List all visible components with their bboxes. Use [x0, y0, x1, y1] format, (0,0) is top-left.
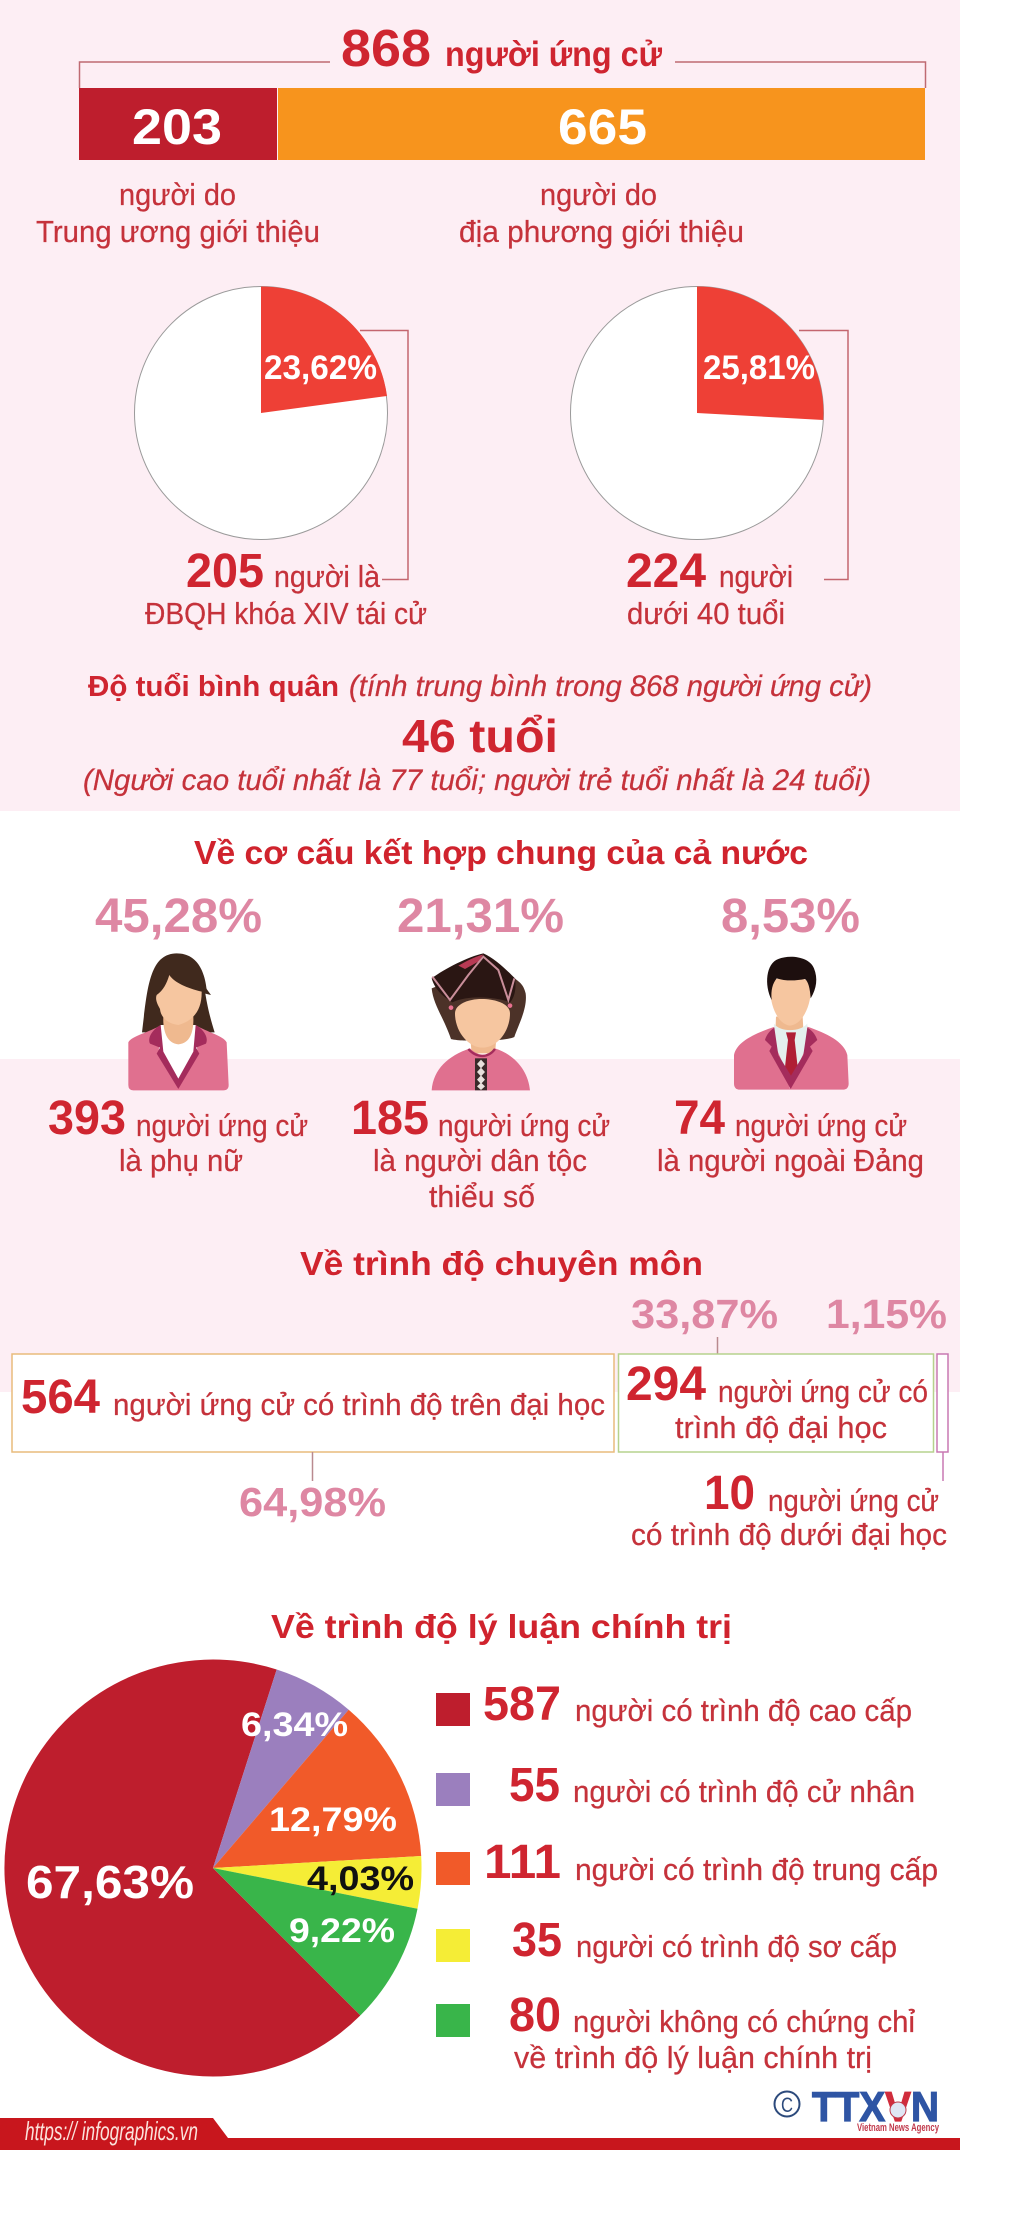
box: university 294	[618, 1354, 934, 1452]
footer: source band	[0, 2116, 960, 2150]
icon: ethnic minority woman	[432, 953, 530, 1090]
panel: qualification bars	[12, 1291, 948, 1552]
callout: 205 re-elected deputies: 205	[186, 545, 264, 598]
column: non-party	[657, 890, 924, 1178]
pie chart: 23,62% re-elected: 23,62%	[264, 349, 377, 387]
box: below university	[937, 1354, 948, 1452]
box: university 294: trình độ đại học	[675, 1410, 887, 1445]
legend item: 35 elementary	[436, 1914, 897, 1967]
callout: 205 re-elected deputies: ĐBQH khóa XIV tái cử	[145, 596, 427, 631]
legend item: 111 intermediate: 111	[484, 1836, 561, 1889]
title: 868 candidates	[341, 20, 663, 78]
percent: ethnic minorities: 21,31%	[397, 890, 564, 943]
caption: 74 non-party: là người ngoài Đảng	[657, 1143, 924, 1178]
box: university 294: 294	[626, 1358, 706, 1411]
pie chart: 25,81% under 40	[570, 286, 824, 540]
pie chart: 25,81% under 40: 25,81%	[703, 349, 815, 387]
label: local nomination: địa phương giới thiệu	[459, 214, 744, 249]
caption: 185 ethnic minorities: là người dân tộc	[373, 1143, 587, 1178]
legend item: 55 bachelor	[436, 1759, 915, 1812]
title: 868 candidates: 868	[341, 20, 431, 78]
caption: 10 below university: 10	[704, 1467, 755, 1520]
text block: average age: 46 tuổi	[402, 710, 558, 762]
bracket above the bar	[80, 62, 926, 88]
pie chart: political theory level	[4, 1660, 422, 2077]
legend item: 80 no certificate: về trình độ lý luận chính trị	[514, 2040, 872, 2075]
legend item: 35 elementary: người có trình độ sơ cấp	[576, 1929, 897, 1964]
caption: 74 non-party	[657, 1092, 924, 1178]
label: central nomination: người do	[119, 177, 236, 212]
heading: political theory: Về trình độ lý luận chính trị	[271, 1608, 732, 1645]
legend item: 80 no certificate	[436, 1989, 915, 2075]
label: local nomination	[459, 177, 744, 249]
connector: first pie to label	[360, 330, 408, 580]
tick: below university box	[942, 1452, 944, 1481]
legend item: 587 advanced: người có trình độ cao cấp	[575, 1693, 912, 1728]
label: local nomination: người do	[540, 177, 657, 212]
caption: 10 below university	[631, 1467, 947, 1552]
icon: man in suit	[734, 957, 849, 1090]
text block: average age: (tính trung bình trong 868 người ứng cử)	[349, 670, 872, 703]
connector: second pie to label	[799, 330, 848, 580]
pie chart: political theory level: 12,79%	[269, 1801, 397, 1839]
heading: national structure: Về cơ cấu kết hợp chung của cả nước	[194, 834, 808, 871]
callout: 224 under 40: 224	[626, 545, 706, 598]
label: central nomination: Trung ương giới thiệu	[36, 214, 320, 249]
percent: 33,87%: 33,87%	[631, 1291, 778, 1337]
panel: total candidates	[36, 20, 926, 249]
percent: non-party: 8,53%	[721, 890, 860, 943]
box: university 294: người ứng cử có	[718, 1374, 928, 1409]
caption: 393 women	[48, 1092, 308, 1178]
footer: source band: https:// infographics.vn	[25, 2116, 198, 2146]
callout: 205 re-elected deputies	[145, 545, 427, 631]
bar segment: 203 central: 203	[132, 99, 222, 155]
bar segment: 203 central	[79, 88, 277, 160]
text block: average age: Độ tuổi bình quân	[88, 671, 339, 703]
legend item: 55 bachelor: người có trình độ cử nhân	[573, 1774, 915, 1809]
pie chart: political theory level: 9,22%	[289, 1912, 395, 1950]
caption: 74 non-party: 74	[674, 1092, 725, 1145]
caption: 74 non-party: người ứng cử	[735, 1108, 907, 1143]
column: women	[48, 890, 308, 1178]
title: 868 candidates: người ứng cử	[445, 35, 663, 74]
callout: 224 under 40	[626, 545, 793, 631]
caption: 185 ethnic minorities: 185	[351, 1092, 429, 1145]
caption: 393 women: người ứng cử	[136, 1108, 308, 1143]
bar segment: 665 local: 665	[558, 99, 647, 155]
text block: average age: (Người cao tuổi nhất là 77 tuổi; người trẻ tuổi nhất là 24 tuổi)	[83, 764, 871, 797]
percent: 1,15%: 1,15%	[826, 1291, 947, 1337]
legend item: 587 advanced: 587	[483, 1678, 561, 1731]
logo: TTXVN: C	[781, 2094, 793, 2117]
caption: 393 women: là phụ nữ	[119, 1143, 243, 1178]
percent: women: 45,28%	[95, 890, 262, 943]
box: postgraduate 564: người ứng cử có trình độ trên đại học	[113, 1387, 605, 1422]
percent: 64,98%: 64,98%	[239, 1479, 386, 1525]
legend item: 55 bachelor: 55	[509, 1759, 560, 1812]
legend item: 80 no certificate: người không có chứng chỉ	[573, 2004, 915, 2039]
caption: 10 below university: có trình độ dưới đại học	[631, 1517, 947, 1552]
box: postgraduate 564	[12, 1354, 614, 1452]
caption: 185 ethnic minorities: thiểu số	[429, 1179, 535, 1214]
caption: 393 women: 393	[48, 1092, 126, 1145]
pie chart: political theory level: 67,63%	[26, 1856, 194, 1908]
callout: 224 under 40: dưới 40 tuổi	[627, 596, 785, 631]
pie chart: political theory level: 6,34%	[241, 1706, 348, 1744]
caption: 185 ethnic minorities	[351, 1092, 610, 1214]
callout: 224 under 40: người	[719, 559, 793, 594]
box: postgraduate 564: 564	[21, 1371, 100, 1424]
logo: TTXVN: TTXVN	[812, 2083, 939, 2130]
caption: 10 below university: người ứng cử	[768, 1483, 939, 1518]
pie chart: political theory level: 4,03%	[307, 1860, 414, 1898]
bar segment: 665 local	[278, 88, 925, 160]
label: central nomination	[36, 177, 320, 249]
column: ethnic minorities	[351, 890, 610, 1214]
legend item: 111 intermediate	[436, 1836, 938, 1889]
tick: university box	[716, 1337, 718, 1354]
tick: postgraduate box	[312, 1452, 314, 1481]
legend item: 587 advanced	[436, 1678, 912, 1731]
legend: political theory	[436, 1678, 938, 2075]
legend item: 80 no certificate: 80	[509, 1989, 561, 2042]
callout: 205 re-elected deputies: người là	[274, 559, 381, 594]
icon: woman	[128, 953, 229, 1090]
caption: 185 ethnic minorities: người ứng cử	[438, 1108, 610, 1143]
text block: average age	[83, 670, 872, 797]
heading: professional qualification: Về trình độ chuyên môn	[300, 1245, 703, 1282]
pie chart: 23,62% re-elected	[134, 286, 388, 540]
legend item: 35 elementary: 35	[512, 1914, 562, 1967]
logo: TTXVN: Vietnam News Agency	[857, 2122, 940, 2134]
legend item: 111 intermediate: người có trình độ trung cấp	[575, 1852, 938, 1887]
